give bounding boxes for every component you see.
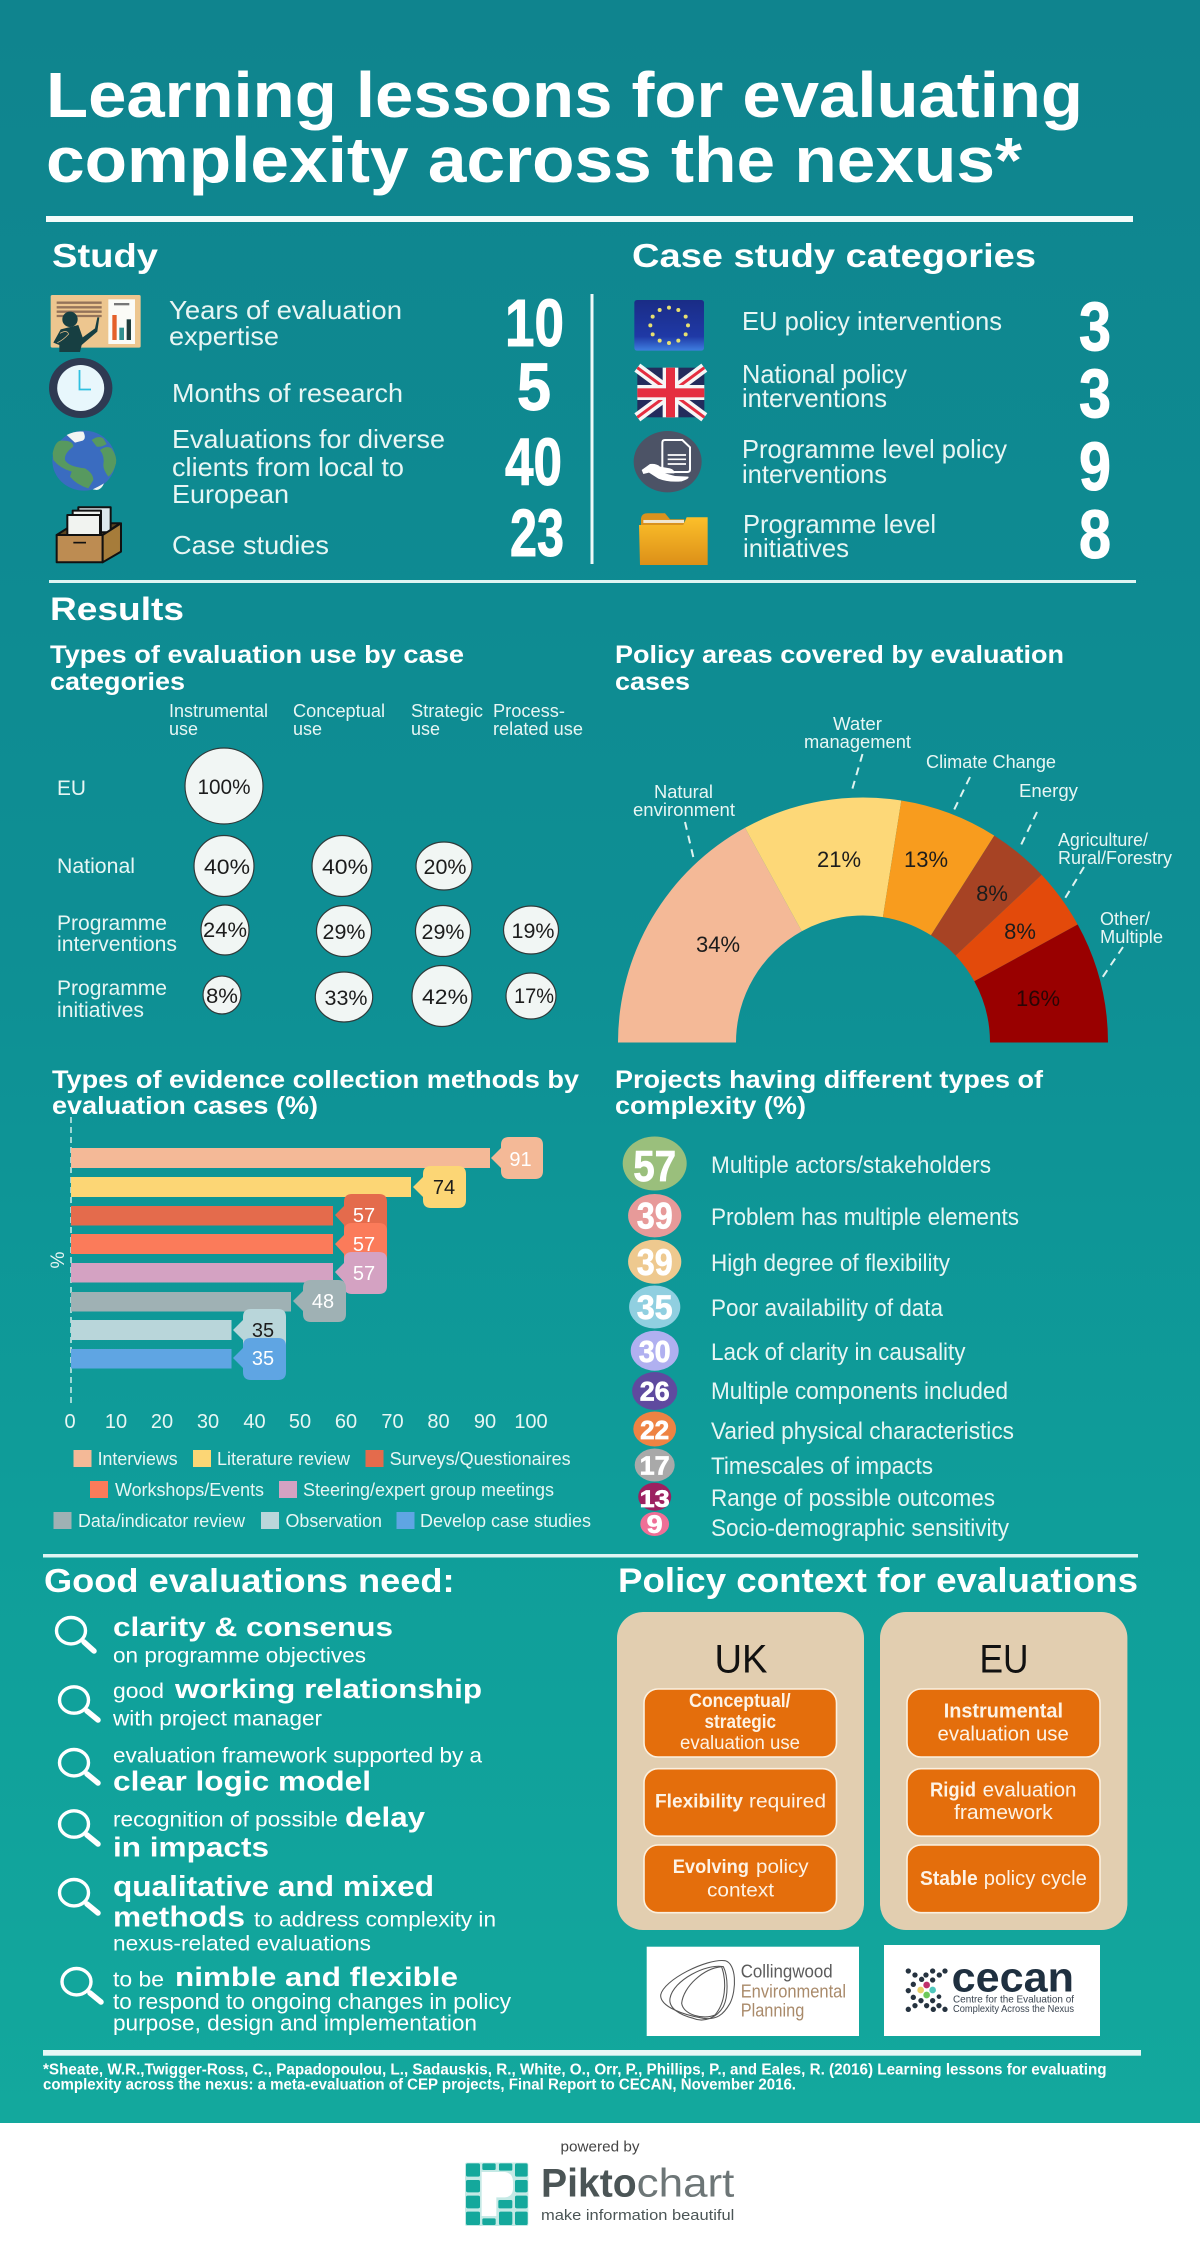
footnote citation: complexity across the nexus: a meta-evaluation of CEP projects, Final Report to CECAN, November 2016.	[43, 2076, 796, 2094]
complexity values: 17	[640, 1450, 670, 1480]
text: months of research: Months of research	[172, 378, 403, 408]
axis labels: 0	[64, 1411, 76, 1433]
chart category labels: Agriculture/	[1058, 830, 1148, 850]
complexity values: 9	[647, 1511, 663, 1539]
chart values: 8%	[1004, 919, 1036, 944]
legend: Steering/expert group meetings	[303, 1480, 554, 1500]
icon: archive box	[57, 507, 121, 562]
chart category labels: environment	[633, 800, 735, 820]
number: 3: 3	[1079, 355, 1111, 432]
complexity circles	[623, 1136, 687, 1536]
footnote citation	[43, 2062, 1107, 2094]
bubble values: 20%	[424, 856, 466, 879]
legend: Workshops/Events	[115, 1480, 264, 1500]
bar: surveys 57: 57	[353, 1205, 375, 1227]
complexity labels	[711, 1152, 1019, 1542]
heading: projects complexity: Projects having different types of	[615, 1066, 1044, 1094]
bar: workshops 57: 57	[353, 1234, 375, 1256]
item: qualitative and mixed methods: nexus-related evaluations	[113, 1933, 371, 1956]
logo wordmark	[541, 2162, 734, 2224]
card: EU: framework	[954, 1802, 1054, 1824]
bubble values: 8%	[206, 985, 238, 1008]
chart category labels: Energy	[1019, 781, 1078, 801]
chart category labels: Water	[833, 714, 882, 734]
bubble values	[198, 776, 554, 1010]
complexity values: 22	[640, 1415, 669, 1445]
complexity labels: Problem has multiple elements	[711, 1204, 1019, 1231]
bar: surveys 57	[71, 1194, 387, 1236]
row labels: Programme	[57, 912, 167, 935]
heading: policy areas: cases	[615, 668, 690, 696]
bar: steering 57	[71, 1252, 387, 1294]
column headers: use	[293, 719, 322, 739]
axis labels: 10	[105, 1411, 127, 1433]
axis labels: 20	[151, 1411, 173, 1433]
bubble values: 29%	[422, 921, 464, 944]
chart values	[696, 847, 1060, 1011]
row labels: Programme	[57, 977, 167, 1000]
item: nimble and flexible	[62, 1962, 511, 2036]
bubble values: 17%	[514, 985, 554, 1008]
number: 3: 3	[1079, 288, 1111, 365]
bubble values: 19%	[512, 920, 554, 943]
row labels: EU	[57, 777, 86, 800]
footer: powered by Piktochart	[465, 2139, 734, 2226]
bar: interviews 91	[71, 1137, 543, 1179]
bar: case studies 35: 35	[252, 1348, 274, 1370]
card: UK: strategic	[704, 1712, 776, 1733]
item: qualitative and mixed methods: to address complexity in	[254, 1909, 496, 1932]
bar: literature review 74: 74	[433, 1177, 455, 1199]
icon: EU flag	[634, 300, 704, 351]
card: EU: evaluation	[983, 1780, 1076, 1802]
bar: workshops 57	[71, 1223, 387, 1265]
complexity values: 35	[637, 1289, 673, 1327]
bar: interviews 91: 91	[509, 1149, 532, 1171]
logo: CECAN: Complexity Across the Nexus	[953, 2003, 1074, 2015]
panel: complexity types	[615, 1066, 1044, 1542]
text: evaluations for diverse clients: clients from local to	[172, 452, 404, 482]
card: UK: Conceptual/	[689, 1691, 791, 1712]
text: national policy interventions: interventions	[742, 383, 887, 413]
complexity labels: Socio-demographic sensitivity	[711, 1515, 1009, 1542]
item: clear logic model: evaluation framework supported by a	[113, 1745, 482, 1768]
text: powered by: powered by	[560, 2139, 640, 2156]
bubble values: 24%	[203, 919, 247, 942]
panel: evaluation use bubble table	[50, 641, 583, 1026]
item: nimble and flexible: to respond to ongoing changes in policy	[113, 1989, 511, 2014]
axis labels: 80	[427, 1411, 450, 1433]
complexity labels: Varied physical characteristics	[711, 1418, 1014, 1445]
axis labels	[64, 1411, 548, 1433]
complexity labels: Multiple actors/stakeholders	[711, 1152, 991, 1179]
item: qualitative and mixed methods: qualitative and mixed	[113, 1871, 434, 1903]
complexity values: 26	[640, 1376, 670, 1406]
column headers: Conceptual	[293, 701, 385, 721]
card: UK: policy	[756, 1857, 809, 1878]
axis labels: 60	[335, 1411, 357, 1433]
row labels: National	[57, 855, 135, 878]
complexity values	[633, 1142, 676, 1539]
column headers: Process-	[493, 701, 565, 721]
title: complexity across the nexus*	[46, 124, 1022, 196]
text: programme level policy interventions: interventions	[742, 459, 887, 489]
card: UK: UK	[714, 1638, 768, 1682]
complexity labels: High degree of flexibility	[711, 1250, 950, 1277]
chart values: 34%	[696, 932, 740, 957]
text: years of evaluation expertise	[169, 295, 402, 351]
item: working relationship: working relationship	[174, 1674, 482, 1704]
item: clarity and consensus	[56, 1612, 393, 1668]
legend: Observation	[286, 1511, 382, 1531]
chart leader lines	[685, 754, 1123, 978]
axis labels: 70	[381, 1411, 404, 1433]
row labels: interventions	[57, 933, 177, 956]
chart category labels: Rural/Forestry	[1058, 848, 1172, 868]
item: delay in impacts: delay	[345, 1802, 425, 1833]
text: EU policy interventions: EU policy interventions	[742, 306, 1002, 336]
text: programme level policy interventions: Programme level policy	[742, 434, 1007, 464]
card: EU: EU	[980, 1638, 1028, 1682]
bar: data review 48	[71, 1280, 346, 1322]
item: working relationship	[60, 1674, 482, 1731]
chart: semi-donut	[618, 797, 1108, 1042]
heading: types of evaluation use	[50, 641, 464, 696]
heading: results: Results	[50, 591, 184, 627]
text: evaluations for diverse clients: European	[172, 479, 289, 509]
panel: study	[49, 237, 564, 571]
title: Learning lessons for evaluating	[46, 59, 1083, 131]
logo wordmark: make information beautiful	[541, 2207, 734, 2224]
logo wordmark: chart	[637, 2162, 734, 2206]
bar: literature review 74	[71, 1166, 466, 1208]
complexity values: 57	[633, 1142, 676, 1191]
item: nimble and flexible: purpose, design and implementation	[113, 2011, 477, 2036]
card: UK: required	[749, 1792, 826, 1813]
icon: folder	[639, 513, 708, 565]
complexity labels: Lack of clarity in causality	[711, 1339, 966, 1366]
card: UK: context	[707, 1881, 775, 1902]
column headers: related use	[493, 719, 583, 739]
icon: clock	[49, 358, 112, 418]
heading: policy areas	[615, 641, 1064, 696]
heading: types of evaluation use: categories	[50, 668, 185, 696]
text: national policy interventions: National policy	[742, 359, 907, 389]
column headers: Strategic	[411, 701, 483, 721]
card: EU: Rigid	[930, 1780, 976, 1802]
item: qualitative and mixed methods	[60, 1871, 496, 1956]
bubble values: 29%	[322, 921, 366, 944]
bar: observation 35: 35	[252, 1320, 274, 1342]
axis labels: 40	[243, 1411, 266, 1433]
title	[46, 59, 1083, 196]
item: delay in impacts	[60, 1802, 425, 1863]
number: 9: 9	[1079, 428, 1111, 505]
heading: types of evaluation use: Types of evaluation use by case	[50, 641, 464, 669]
legend	[54, 1449, 591, 1531]
footnote citation: *Sheate, W.R.,Twigger-Ross, C., Papadopoulou, L., Sadauskis, R., White, O., Orr, P., Phillips, P., and Eales, R. (2016) Learning lessons for evaluating	[43, 2062, 1107, 2078]
number: 5: 5	[517, 350, 551, 425]
logo: Collingwood Environmental Planning	[647, 1947, 859, 2036]
legend: Literature review	[217, 1449, 351, 1469]
heading: projects complexity: complexity (%)	[615, 1092, 806, 1120]
text: case studies: Case studies	[172, 530, 329, 560]
legend: Interviews	[98, 1449, 178, 1469]
chart category labels	[633, 714, 1172, 947]
panel: policy context	[617, 1562, 1138, 2036]
column headers: use	[169, 719, 198, 739]
bar: observation 35	[71, 1309, 286, 1351]
number: 40: 40	[505, 425, 562, 500]
complexity values: 39	[637, 1242, 673, 1283]
item: clarity and consensus: clarity & consenus	[113, 1612, 393, 1642]
logo: Collingwood Environmental Planning: Environmental	[741, 1981, 846, 2001]
panel: policy areas semi-donut	[615, 641, 1172, 1042]
item: nimble and flexible: nimble and flexible	[175, 1962, 458, 1992]
item: delay in impacts: in impacts	[113, 1832, 269, 1863]
row labels: initiatives	[57, 999, 144, 1022]
text: years of evaluation expertise: Years of evaluation	[169, 295, 402, 325]
bubble values: 42%	[422, 986, 468, 1009]
complexity values: 30	[639, 1334, 671, 1369]
row labels	[57, 777, 177, 1022]
heading: evidence collection methods	[52, 1066, 579, 1120]
card: EU: Stable	[920, 1868, 978, 1890]
axis labels: 30	[197, 1411, 219, 1433]
chart values: 13%	[904, 847, 948, 872]
axis title: %	[48, 1251, 69, 1268]
card: UK: evaluation use	[680, 1733, 800, 1754]
logo: CECAN	[884, 1945, 1100, 2036]
panel: case study categories	[632, 237, 1111, 573]
logo: CECAN: Centre for the Evaluation of	[953, 1994, 1074, 2006]
heading: projects complexity	[615, 1066, 1044, 1120]
icon: presentation board	[51, 295, 141, 352]
axis labels: 100	[514, 1411, 548, 1433]
item: working relationship: good	[113, 1680, 164, 1703]
text: programme level policy interventions	[742, 434, 1007, 489]
complexity values: 13	[640, 1486, 670, 1513]
heading: evidence collection methods: evaluation cases (%)	[52, 1092, 318, 1120]
text: evaluations for diverse clients: Evaluations for diverse	[172, 424, 445, 454]
card: UK: Evolving	[673, 1857, 749, 1878]
chart category labels: Other/	[1100, 909, 1150, 929]
text: years of evaluation expertise: expertise	[169, 321, 279, 351]
panel: evidence collection bar chart	[48, 1066, 591, 1531]
bubble values: 40%	[204, 856, 250, 879]
heading: study: Study	[52, 237, 159, 274]
card: EU: evaluation use	[938, 1724, 1069, 1746]
card: EU: policy cycle	[984, 1868, 1087, 1890]
number: 23: 23	[510, 496, 564, 571]
icon: globe	[52, 431, 116, 491]
number: 8: 8	[1079, 496, 1111, 573]
item: working relationship: with project manager	[112, 1708, 322, 1731]
column headers	[169, 701, 583, 739]
heading: case study categories: Case study categories	[632, 237, 1036, 274]
chart category labels: Natural	[654, 782, 713, 802]
chart category labels: Multiple	[1100, 927, 1163, 947]
column headers: use	[411, 719, 440, 739]
complexity values: 39	[637, 1196, 673, 1236]
icon: UK flag	[637, 368, 704, 417]
text: programme level initiatives: initiatives	[743, 533, 849, 563]
legend: Develop case studies	[420, 1511, 591, 1531]
text: programme level initiatives: Programme level	[743, 509, 936, 539]
card: EU: Instrumental	[944, 1701, 1063, 1723]
complexity labels: Multiple components included	[711, 1378, 1008, 1405]
heading: good evaluations need: Good evaluations need:	[44, 1562, 455, 1599]
number: 10: 10	[505, 286, 564, 361]
item: clear logic model	[60, 1745, 482, 1797]
icon: document in hand	[634, 431, 702, 492]
complexity labels: Timescales of impacts	[711, 1453, 933, 1480]
heading: evidence collection methods: Types of evidence collection methods by	[52, 1066, 579, 1094]
bar: data review 48: 48	[312, 1291, 334, 1313]
item: qualitative and mixed methods: methods	[113, 1902, 245, 1934]
legend: Data/indicator review	[78, 1511, 246, 1531]
item: clarity and consensus: on programme objectives	[113, 1645, 366, 1668]
item: clear logic model: clear logic model	[113, 1766, 371, 1797]
bubble values: 40%	[322, 856, 368, 879]
chart values: 8%	[976, 881, 1008, 906]
logo: Collingwood Environmental Planning: Planning	[741, 2001, 804, 2021]
bar: steering 57: 57	[353, 1263, 375, 1285]
logo wordmark: Pikto	[541, 2162, 637, 2206]
item: delay in impacts: recognition of possible	[113, 1809, 338, 1832]
panel: good evaluations need	[44, 1562, 511, 2036]
card: UK	[617, 1612, 864, 1930]
text: national policy interventions	[742, 359, 907, 413]
chart values: 21%	[817, 847, 861, 872]
axis labels: 90	[474, 1411, 496, 1433]
logo: Collingwood Environmental Planning: Collingwood	[741, 1961, 833, 1981]
legend: Surveys/Questionaires	[390, 1449, 571, 1469]
column headers: Instrumental	[169, 701, 268, 721]
card: EU	[880, 1612, 1127, 1930]
item: nimble and flexible: to be	[113, 1969, 164, 1992]
complexity labels: Range of possible outcomes	[711, 1485, 995, 1512]
card: UK: Flexibility	[655, 1792, 743, 1813]
chart category labels: Climate Change	[926, 752, 1056, 772]
logo icon: Piktochart mark	[465, 2163, 528, 2226]
axis labels: 50	[289, 1411, 311, 1433]
bubble values: 100%	[198, 776, 250, 799]
bubbles	[185, 748, 558, 1026]
text: programme level initiatives	[743, 509, 936, 563]
bar: case studies 35	[71, 1338, 286, 1380]
chart category labels: management	[804, 732, 911, 752]
logo: CECAN: cecan	[952, 1954, 1074, 2001]
heading: policy context: Policy context for evaluations	[618, 1562, 1138, 1600]
complexity labels: Poor availability of data	[711, 1295, 944, 1322]
heading: policy areas: Policy areas covered by evaluation	[615, 641, 1064, 669]
text: evaluations for diverse clients	[172, 424, 445, 509]
chart values: 16%	[1016, 986, 1060, 1011]
bubble values: 33%	[324, 987, 368, 1010]
